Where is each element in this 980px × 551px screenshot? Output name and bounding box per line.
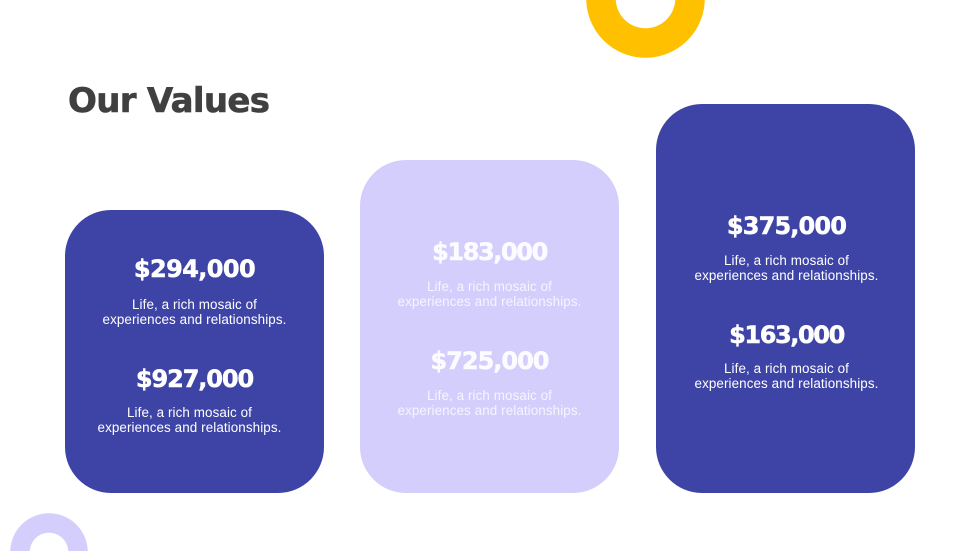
right card second description: Life, a rich mosaic of (724, 361, 849, 376)
left card second description: experiences and relationships. (98, 420, 281, 435)
left card first description: Life, a rich mosaic of (132, 297, 257, 312)
panel: right card (656, 104, 915, 493)
left card first description: experiences and relationships. (103, 312, 286, 327)
yellow ring decoration (586, 0, 705, 58)
middle card first description: Life, a rich mosaic of (427, 279, 552, 294)
right card first description: experiences and relationships. (695, 268, 878, 283)
lavender ring decoration (10, 513, 88, 551)
left card second description: Life, a rich mosaic of (127, 405, 252, 420)
left card second description (98, 405, 281, 435)
left card first description (103, 297, 286, 327)
middle card first description: experiences and relationships. (398, 294, 581, 309)
right card first description (695, 253, 878, 283)
left card first value: $294,000 (134, 255, 255, 283)
right card second description (695, 361, 878, 391)
title: Our Values (68, 81, 269, 121)
middle card second value: $725,000 (430, 347, 548, 375)
panel: middle card (360, 160, 619, 493)
right card first value: $375,000 (727, 212, 846, 240)
middle card second description: Life, a rich mosaic of (427, 388, 552, 403)
middle card second description (398, 388, 581, 418)
middle card first value: $183,000 (432, 238, 547, 266)
middle card first description (398, 279, 581, 309)
panel: left card (65, 210, 324, 493)
middle card second description: experiences and relationships. (398, 403, 581, 418)
right card first description: Life, a rich mosaic of (724, 253, 849, 268)
left card second value: $927,000 (136, 365, 253, 393)
right card second value: $163,000 (729, 321, 844, 349)
right card second description: experiences and relationships. (695, 376, 878, 391)
